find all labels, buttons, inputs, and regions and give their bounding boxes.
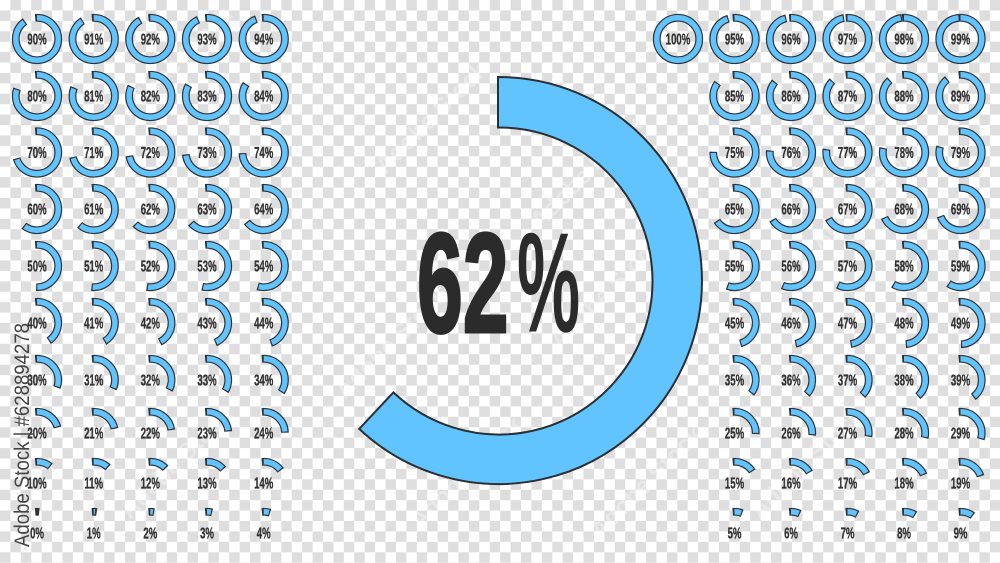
ring 87%: 87% <box>838 87 858 105</box>
ring 10%: 10% <box>27 474 47 492</box>
ring 43%: 43% <box>197 314 217 332</box>
ring 83%: 83% <box>197 87 217 105</box>
ring 74% <box>242 131 285 174</box>
large percent sign: % <box>517 202 580 362</box>
ring 33%: 33% <box>197 371 217 389</box>
ring 29% <box>939 412 982 454</box>
ring 38% <box>883 359 925 401</box>
ring 78%: 78% <box>894 144 914 162</box>
ring 88%: 88% <box>894 87 914 105</box>
ring 69%: 69% <box>951 200 971 218</box>
ring 37%: 37% <box>838 371 858 389</box>
ring 25% <box>713 412 756 454</box>
ring 12% <box>129 462 172 504</box>
ring 25%: 25% <box>725 424 745 442</box>
ring 100% <box>657 18 699 60</box>
ring 80% <box>16 75 58 117</box>
ring 54% <box>242 245 285 287</box>
ring 44%: 44% <box>254 314 274 332</box>
ring 53%: 53% <box>197 257 217 275</box>
ring 11%: 11% <box>84 474 103 492</box>
ring 49% <box>939 302 982 344</box>
ring 90%: 90% <box>27 30 47 48</box>
ring 60%: 60% <box>27 200 47 218</box>
ring 72% <box>129 131 172 174</box>
ring 39% <box>939 359 982 401</box>
ring 4% <box>242 512 285 554</box>
large arc <box>359 77 702 484</box>
ring 87% <box>826 75 869 117</box>
ring 77% <box>826 131 869 174</box>
faint diagonal watermarks: Adobe Stock <box>370 56 493 179</box>
ring 9%: 9% <box>954 524 968 542</box>
ring 55%: 55% <box>725 257 745 275</box>
ring 21%: 21% <box>84 424 104 442</box>
ring 1% <box>72 512 115 554</box>
ring 8%: 8% <box>897 524 911 542</box>
ring 83% <box>186 75 228 117</box>
ring 96% <box>770 18 812 60</box>
ring 31%: 31% <box>84 371 104 389</box>
ring 73% <box>186 131 228 174</box>
ring 42%: 42% <box>141 314 160 332</box>
ring 4%: 4% <box>257 524 271 542</box>
ring 28% <box>883 412 925 454</box>
ring 65% <box>713 188 756 230</box>
ring 12%: 12% <box>141 474 160 492</box>
ring 43% <box>186 302 228 344</box>
ring 84% <box>242 75 285 117</box>
faint diagonal watermarks: Adobe Stock <box>330 281 453 404</box>
ring 81%: 81% <box>84 87 104 105</box>
faint diagonal watermarks: Adobe Stock <box>585 421 708 544</box>
ring 29%: 29% <box>951 424 971 442</box>
ring 70%: 70% <box>27 144 47 162</box>
ring 52% <box>129 245 172 287</box>
faint diagonal watermarks <box>115 1 928 544</box>
ring 56% <box>770 245 812 287</box>
ring 71% <box>72 131 115 174</box>
ring 49%: 49% <box>951 314 971 332</box>
ring 64% <box>242 188 285 230</box>
ring 75% <box>713 131 756 174</box>
ring 27%: 27% <box>838 424 858 442</box>
ring 63% <box>186 188 228 230</box>
ring 86%: 86% <box>781 87 801 105</box>
ring 61% <box>72 188 115 230</box>
ring 65%: 65% <box>725 200 745 218</box>
ring 28%: 28% <box>894 424 914 442</box>
ring 20% <box>16 412 58 454</box>
ring 54%: 54% <box>254 257 274 275</box>
vertical stock credit text: Adobe Stock | #628894278 <box>11 323 34 547</box>
ring 89% <box>939 75 982 117</box>
ring 50% <box>16 245 58 287</box>
ring 10% <box>16 462 58 504</box>
ring 50%: 50% <box>27 257 47 275</box>
ring 57% <box>826 245 869 287</box>
ring 5% <box>713 512 756 554</box>
ring 22% <box>129 412 172 454</box>
ring 52%: 52% <box>141 257 160 275</box>
ring 32% <box>129 359 172 401</box>
ring 85% <box>713 75 756 117</box>
faint diagonal watermarks: Adobe Stock <box>115 1 238 124</box>
ring 21% <box>72 412 115 454</box>
right percentage rings panel: 5 to 100 <box>657 18 982 554</box>
ring 24% <box>242 412 285 454</box>
ring 78% <box>883 131 925 174</box>
ring 82% <box>129 75 172 117</box>
ring 23% <box>186 412 228 454</box>
ring 72%: 72% <box>141 144 160 162</box>
ring 0%: 0% <box>30 524 44 542</box>
ring 5%: 5% <box>728 524 742 542</box>
ring 33% <box>186 359 228 401</box>
ring 90% <box>16 18 58 60</box>
ring 91%: 91% <box>84 30 104 48</box>
ring 1%: 1% <box>87 524 101 542</box>
ring 13% <box>186 462 228 504</box>
faint diagonal watermarks: Adobe Stock <box>545 231 668 354</box>
ring 22%: 22% <box>141 424 160 442</box>
ring 76% <box>770 131 812 174</box>
ring 40% <box>16 302 58 344</box>
ring 46%: 46% <box>781 314 801 332</box>
ring 42% <box>129 302 172 344</box>
ring 15% <box>713 462 756 504</box>
ring 80%: 80% <box>27 87 47 105</box>
ring 34% <box>242 359 285 401</box>
ring 38%: 38% <box>894 371 914 389</box>
ring 6% <box>770 512 812 554</box>
ring 63%: 63% <box>197 200 217 218</box>
ring 93% <box>186 18 228 60</box>
ring 59% <box>939 245 982 287</box>
ring 93%: 93% <box>197 30 217 48</box>
ring 71%: 71% <box>84 144 104 162</box>
ring 8% <box>883 512 925 554</box>
ring 99% <box>939 18 982 60</box>
ring 0% <box>16 512 58 554</box>
ring 51%: 51% <box>84 257 104 275</box>
ring 98% <box>883 18 925 60</box>
ring 41%: 41% <box>84 314 104 332</box>
ring 19% <box>939 462 982 504</box>
ring 88% <box>883 75 925 117</box>
ring 9% <box>939 512 982 554</box>
faint diagonal watermarks: Adobe Stock <box>115 401 238 524</box>
ring 44% <box>242 302 285 344</box>
ring 96%: 96% <box>781 30 801 48</box>
ring 95% <box>713 18 756 60</box>
ring 30% <box>16 359 58 401</box>
ring 2% <box>129 512 172 554</box>
ring 31% <box>72 359 115 401</box>
ring 11% <box>72 462 115 504</box>
ring 47% <box>826 302 869 344</box>
ring 69% <box>939 188 982 230</box>
ring 77%: 77% <box>838 144 858 162</box>
large value 62: 62 <box>417 204 509 363</box>
ring 2%: 2% <box>143 524 158 542</box>
ring 15%: 15% <box>725 474 745 492</box>
ring 48%: 48% <box>894 314 914 332</box>
ring 94%: 94% <box>254 30 274 48</box>
ring 20%: 20% <box>27 424 47 442</box>
ring 14%: 14% <box>254 474 274 492</box>
ring 62% <box>129 188 172 230</box>
ring 59%: 59% <box>951 257 971 275</box>
ring 58%: 58% <box>894 257 914 275</box>
ring 6%: 6% <box>784 524 798 542</box>
ring 46% <box>770 302 812 344</box>
ring 100%: 100% <box>666 30 691 48</box>
ring 3% <box>186 512 228 554</box>
ring 7%: 7% <box>841 524 855 542</box>
ring 3%: 3% <box>200 524 214 542</box>
ring 45% <box>713 302 756 344</box>
faint diagonal watermarks: Adobe Stock <box>745 401 868 524</box>
ring 68% <box>883 188 925 230</box>
faint diagonal watermarks: Adobe Stock <box>805 131 928 254</box>
ring 74%: 74% <box>254 144 274 162</box>
faint diagonal watermarks: Adobe Stock <box>405 411 528 534</box>
ring 67%: 67% <box>838 200 858 218</box>
ring 91% <box>72 18 115 60</box>
ring 62%: 62% <box>141 200 160 218</box>
ring 24%: 24% <box>254 424 274 442</box>
ring 73%: 73% <box>197 144 217 162</box>
ring 79% <box>939 131 982 174</box>
ring 17%: 17% <box>838 474 858 492</box>
left percentage rings panel: 0 to 94 <box>16 18 285 554</box>
ring 79%: 79% <box>951 144 971 162</box>
ring 51% <box>72 245 115 287</box>
ring 86% <box>770 75 812 117</box>
ring 68%: 68% <box>894 200 914 218</box>
ring 94% <box>242 18 285 60</box>
ring 16%: 16% <box>781 474 801 492</box>
ring 32%: 32% <box>141 371 160 389</box>
ring 35%: 35% <box>725 371 745 389</box>
ring 85%: 85% <box>725 87 745 105</box>
ring 92%: 92% <box>141 30 160 48</box>
ring 99%: 99% <box>951 30 971 48</box>
ring 81% <box>72 75 115 117</box>
ring 23%: 23% <box>197 424 217 442</box>
ring 30%: 30% <box>27 371 47 389</box>
ring 16% <box>770 462 812 504</box>
ring 26%: 26% <box>781 424 801 442</box>
ring 41% <box>72 302 115 344</box>
large 62% ring <box>359 77 702 484</box>
ring 47%: 47% <box>838 314 858 332</box>
ring 95%: 95% <box>725 30 745 48</box>
ring 53% <box>186 245 228 287</box>
ring 17% <box>826 462 869 504</box>
ring 36% <box>770 359 812 401</box>
ring 18% <box>883 462 925 504</box>
ring 92% <box>129 18 172 60</box>
ring 67% <box>826 188 869 230</box>
ring 27% <box>826 412 869 454</box>
ring 66% <box>770 188 812 230</box>
ring 35% <box>713 359 756 401</box>
ring 57%: 57% <box>838 257 858 275</box>
ring 61%: 61% <box>84 200 104 218</box>
ring 75%: 75% <box>725 144 745 162</box>
ring 89%: 89% <box>951 87 971 105</box>
ring 97% <box>826 18 869 60</box>
ring 37% <box>826 359 869 401</box>
ring 60% <box>16 188 58 230</box>
ring 40%: 40% <box>27 314 47 332</box>
ring 34%: 34% <box>254 371 274 389</box>
ring 39%: 39% <box>951 371 971 389</box>
ring 58% <box>883 245 925 287</box>
ring 70% <box>16 131 58 174</box>
ring 82%: 82% <box>141 87 160 105</box>
ring 13%: 13% <box>197 474 217 492</box>
ring 45%: 45% <box>725 314 745 332</box>
faint diagonal watermarks: Adobe Stock <box>525 111 648 234</box>
ring 26% <box>770 412 812 454</box>
ring 48% <box>883 302 925 344</box>
ring 98%: 98% <box>894 30 914 48</box>
ring 19%: 19% <box>951 474 971 492</box>
ring 64%: 64% <box>254 200 274 218</box>
ring 18%: 18% <box>894 474 914 492</box>
ring 14% <box>242 462 285 504</box>
ring 56%: 56% <box>781 257 801 275</box>
ring 66%: 66% <box>781 200 801 218</box>
ring 7% <box>826 512 869 554</box>
ring 84%: 84% <box>254 87 274 105</box>
ring 97%: 97% <box>838 30 858 48</box>
ring 36%: 36% <box>781 371 801 389</box>
ring 55% <box>713 245 756 287</box>
ring 76%: 76% <box>781 144 801 162</box>
